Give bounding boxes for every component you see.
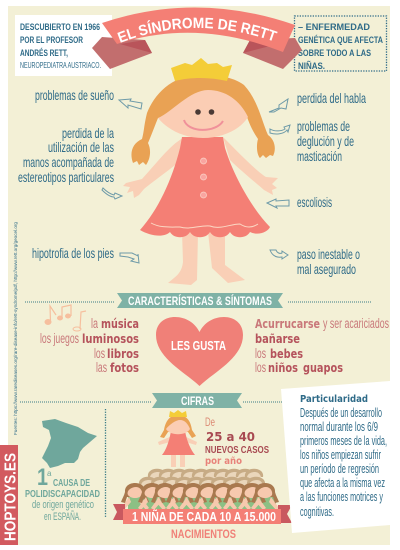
section ribbon: characteristics: CARACTERÍSTICAS & SÍNTOMAS [128,293,272,308]
right arm [223,137,278,195]
list: things they like, left: la [91,316,98,331]
smile [184,120,223,130]
labels: symptoms right: mal asegurado [297,261,356,277]
labels: symptoms left: hipotrofia de los pies [32,245,114,261]
left leg [168,232,198,285]
callout: genetic disease: – ENFERMEDAD [298,22,370,33]
list: things they like, right: Acurrucarse [255,316,320,331]
text block: discovery note: DESCUBIERTO EN 1966 [20,22,100,33]
panel: particularity [281,381,390,533]
list: things they like, right: bebes [270,346,303,361]
stat: new cases: 25 a 40 [206,429,255,444]
title banner: EL SÍNDROME DE RETT [117,18,278,43]
arrow: sleep problems [119,99,142,109]
list: things they like, right: bañarse [255,331,300,346]
text block: discovery note: POR EL PROFESOR [20,35,83,46]
list: things they like, left: música [101,316,139,331]
panel: particularity: Particularidad [300,394,368,405]
labels: symptoms left: utilización de las [48,139,114,155]
stat: first cause: de origen genético [32,499,94,511]
list: things they like, left: los juegos [40,331,79,346]
labels: symptoms left [18,87,114,261]
list: things they like, right: los [255,346,266,361]
title [120,28,278,43]
list: things they like, right [255,316,389,375]
hem line [151,223,258,228]
list: things they like, left [40,316,139,375]
buttons [200,158,206,198]
icon: music notes [45,305,86,331]
list: things they like, left: los [94,346,105,361]
dress [140,137,270,237]
text block: discovery note [15,15,112,76]
girl illustration [123,58,278,285]
text block: discovery note: ANDRÉS RETT, [20,48,68,59]
face [158,90,248,138]
callout: genetic disease [294,16,386,72]
callout: genetic disease: NIÑAS. [298,61,325,72]
left arm [123,138,184,198]
callout: genetic disease: SOBRE TODO A LAS [298,48,371,59]
stat: new cases: por año [205,456,242,467]
icon: map of Spain [42,419,97,468]
labels: symptoms left: perdida de la [62,125,114,141]
hair and braids [131,75,275,165]
stat: new cases: De [205,415,215,429]
list: things they like, left: luminosos [82,331,139,346]
arrow: speech loss [269,99,288,112]
panel: particularity: cognitivas. [300,504,334,519]
text block: discovery note: NEUROPEDIATRA AUSTRIACO. [20,60,101,70]
arrow: feet [120,253,139,263]
arrow: swallowing [270,125,290,134]
heart: les gusta: LES GUSTA [171,338,226,353]
labels: symptoms right: escoliosis [297,194,332,210]
arrow: hand [102,188,122,199]
labels: symptoms right: paso inestable o [297,246,360,262]
stat: first cause: 1 [37,464,48,491]
labels: symptoms right: deglución y de [297,133,354,149]
list: things they like, right: los [255,360,266,375]
list: things they like, right: niños [268,360,298,375]
heart: les gusta [156,317,243,386]
eyes [195,109,214,115]
source credit: Fuentes: https://www.rarediseases.org/rare-disease-info/rett-syndrome/pdf, http://www.rett.org/geocel.org [13,222,18,435]
crowd of girls [121,469,279,510]
labels: symptoms left: manos acompañada de [23,154,114,170]
list: things they like, left: fotos [110,360,139,375]
stat: first cause: a [47,469,52,478]
labels: symptoms left: estereotipos particulares [18,169,114,185]
stat: new cases [205,415,269,467]
right leg [208,232,245,283]
list: things they like, right: guapos [303,360,343,375]
stat: first cause [25,464,100,523]
brand tab: HOPTOYS.ES [2,453,20,541]
stat: first cause: CAUSA DE [53,478,90,489]
labels: symptoms right: masticación [297,148,342,164]
label: births: NACIMIENTOS [171,527,236,541]
section ribbon: cifras [152,393,242,408]
labels: symptoms right: problemas de [297,118,350,134]
stat: first cause: en ESPAÑA. [44,510,81,523]
small girl illustration [158,410,197,467]
labels: symptoms left: problemas de sueño [35,87,114,103]
stat: new cases: NUEVOS CASOS [205,444,269,456]
list: things they like, left: libros [107,346,139,361]
arrow: scoliosis [267,199,289,208]
title banner [92,8,302,69]
stat: first cause: POLIDISCAPACIDAD [25,488,100,500]
crown [171,58,232,81]
banner: births ratio [113,504,292,524]
banner: births ratio: 1 NIÑA DE CADA 10 A 15.000 [132,509,276,524]
labels: symptoms right [297,90,366,277]
arrow: gait [270,250,288,259]
list: things they like, left: las [96,360,107,375]
section ribbon: cifras: CIFRAS [181,394,214,408]
